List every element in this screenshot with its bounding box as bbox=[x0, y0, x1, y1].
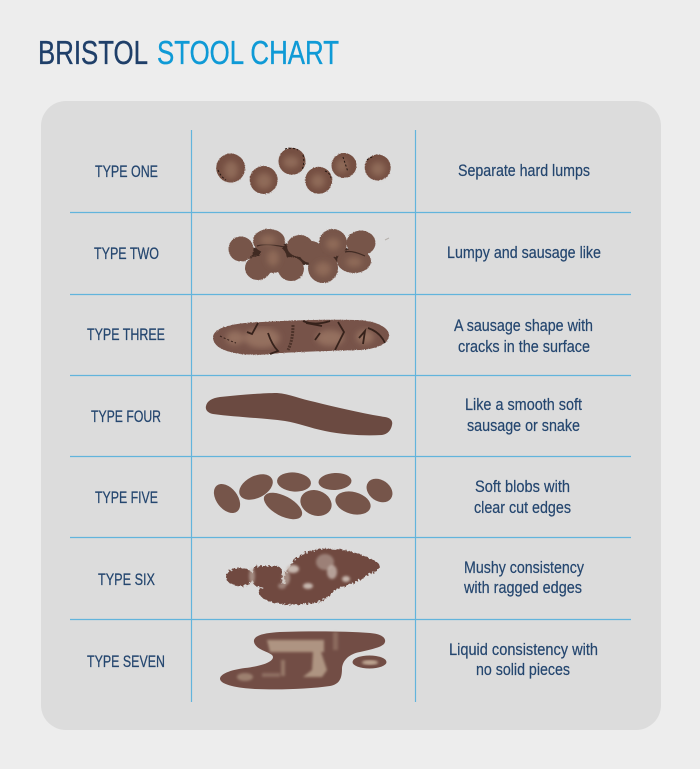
description: type five: clear cut edges bbox=[474, 499, 571, 517]
illustration: smooth sausage bbox=[206, 393, 392, 435]
row: type one bbox=[95, 148, 391, 194]
label: type one: TYPE ONE bbox=[95, 162, 158, 181]
row: type two bbox=[94, 229, 389, 283]
description: type four: Like a smooth soft bbox=[465, 396, 582, 414]
row: type five bbox=[95, 469, 397, 525]
descriptions column bbox=[447, 162, 601, 679]
panel: chart table bbox=[41, 101, 661, 730]
label: type two: TYPE TWO bbox=[94, 244, 159, 263]
row: type six bbox=[98, 549, 380, 605]
illustration: mushy ragged bbox=[226, 549, 380, 605]
illustration: lumpy sausage bbox=[228, 229, 389, 283]
description: type six: Mushy consistency bbox=[464, 559, 585, 577]
illustration: soft blobs bbox=[209, 469, 397, 525]
description: type six: with ragged edges bbox=[463, 579, 582, 597]
row: type four bbox=[91, 393, 392, 435]
title: STOOL CHART bbox=[157, 34, 339, 71]
label: type five: TYPE FIVE bbox=[95, 488, 158, 507]
description: type four bbox=[465, 396, 582, 435]
description: type two: Lumpy and sausage like bbox=[447, 244, 601, 262]
illustration: liquid puddle bbox=[220, 631, 386, 689]
description: type seven bbox=[449, 641, 598, 679]
label: type three: TYPE THREE bbox=[87, 325, 165, 344]
description: type five: Soft blobs with bbox=[475, 478, 570, 496]
description: type four: sausage or snake bbox=[467, 417, 580, 435]
description: type seven: Liquid consistency with bbox=[449, 641, 598, 659]
description: type one: Separate hard lumps bbox=[458, 162, 590, 180]
description: type three: A sausage shape with bbox=[454, 317, 593, 335]
description: type five bbox=[474, 478, 571, 517]
label: type six: TYPE SIX bbox=[98, 570, 155, 589]
description: type six bbox=[463, 559, 585, 597]
description: type three bbox=[454, 317, 593, 356]
row: type seven bbox=[87, 631, 386, 689]
row: type three bbox=[87, 320, 389, 355]
label: type seven: TYPE SEVEN bbox=[87, 652, 165, 671]
illustration: cracked sausage bbox=[213, 320, 389, 355]
description: type seven: no solid pieces bbox=[476, 661, 570, 679]
description: type three: cracks in the surface bbox=[458, 338, 590, 356]
label: type four: TYPE FOUR bbox=[91, 407, 161, 426]
title bbox=[38, 34, 339, 71]
illustration: separate hard lumps bbox=[216, 148, 391, 194]
title: BRISTOL bbox=[38, 34, 148, 71]
